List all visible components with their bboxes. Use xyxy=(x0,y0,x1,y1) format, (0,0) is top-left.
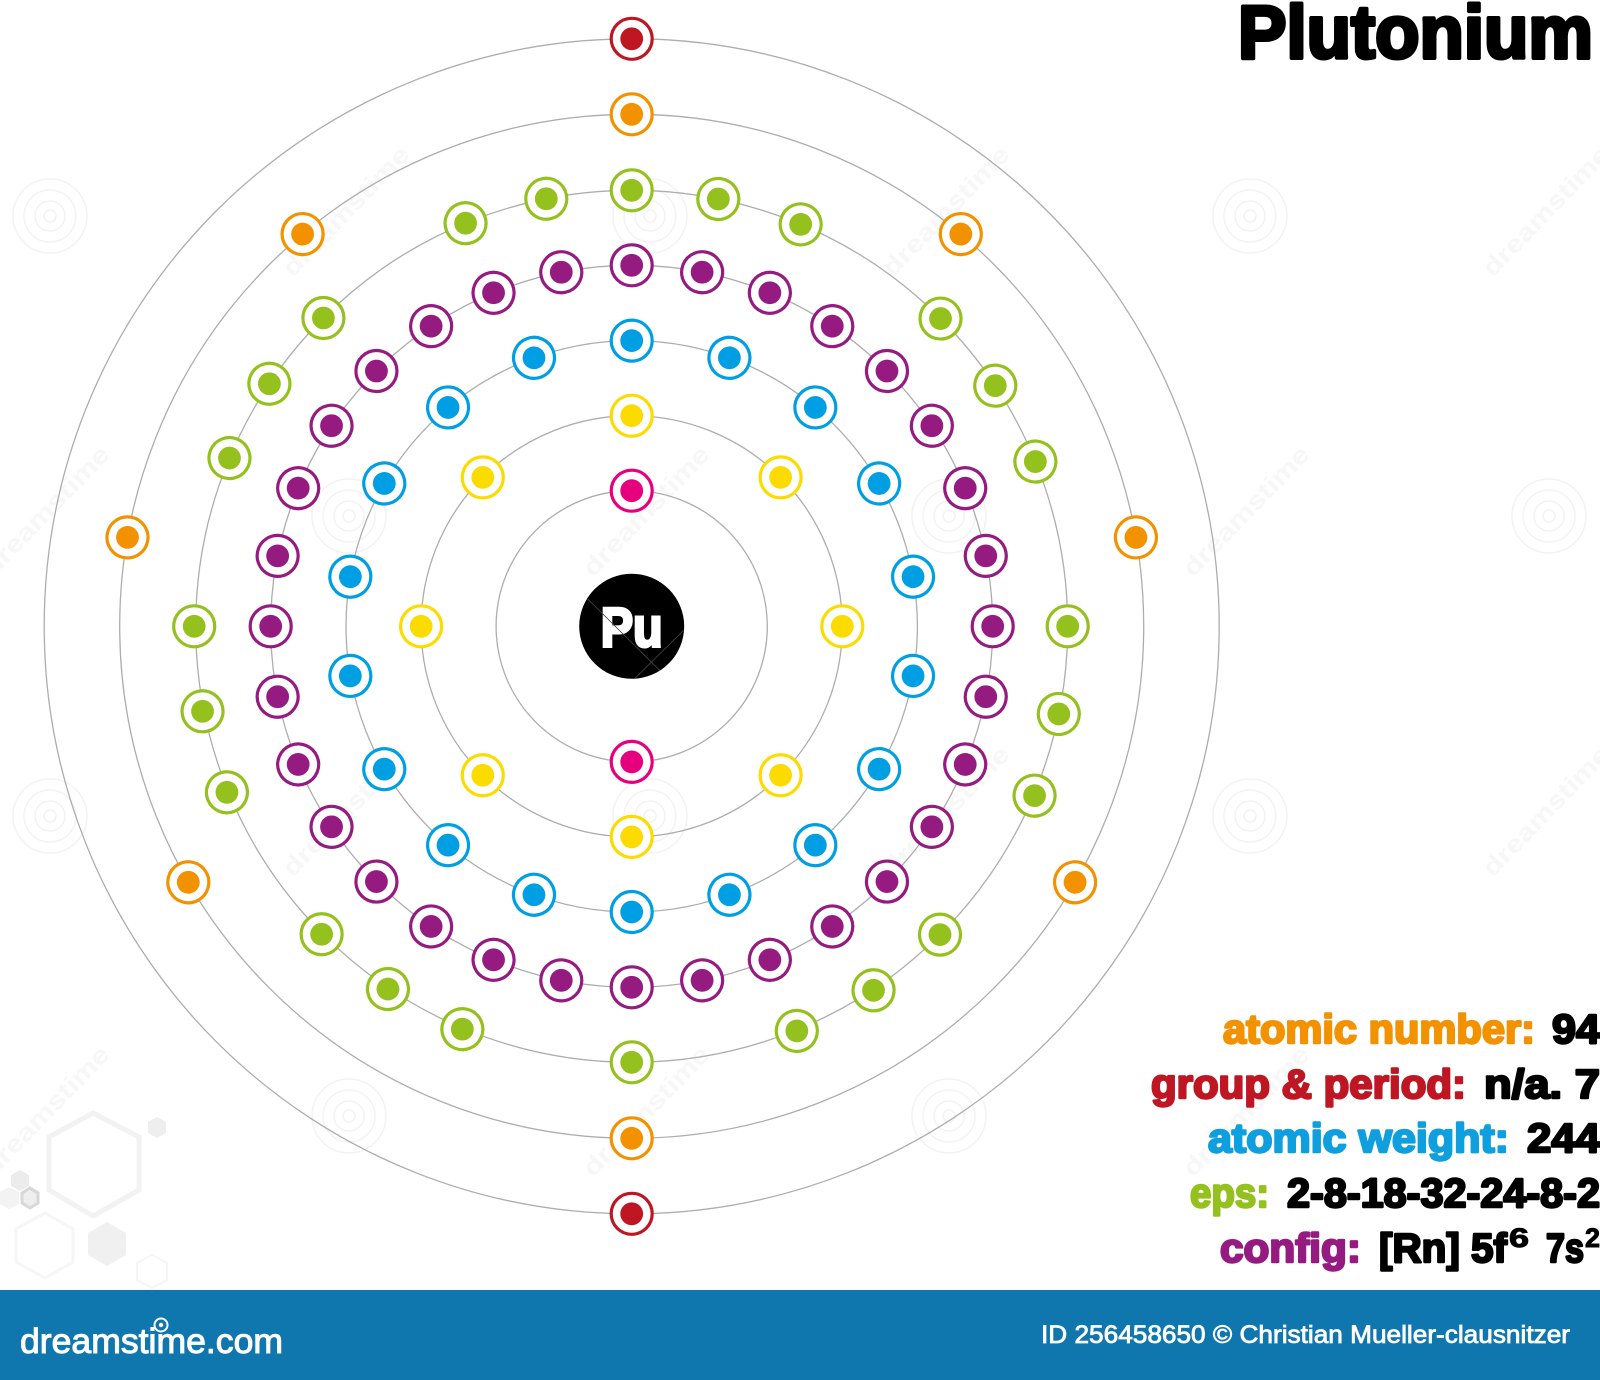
watermark pattern xyxy=(0,140,1600,1182)
watermark pattern: dreamstime xyxy=(277,140,415,282)
watermark pattern: dreamstime xyxy=(1177,1040,1315,1182)
fact: group and period: group & period: xyxy=(1151,1061,1466,1107)
shell 1 electrons: pink xyxy=(611,470,652,782)
fact: electrons per shell: eps: xyxy=(1190,1170,1269,1216)
watermark pattern: dreamstime xyxy=(877,740,1015,882)
fact: group and period: n/a. 7 xyxy=(1484,1061,1600,1107)
fact: atomic number: 94 xyxy=(1552,1006,1600,1052)
atom diagram xyxy=(44,18,1219,1234)
fact: electron configuration: config: xyxy=(1220,1225,1361,1271)
fact: electron configuration xyxy=(1220,1223,1600,1271)
fact: electron configuration: 6 xyxy=(1509,1223,1529,1253)
shell 3 electrons: blue xyxy=(327,320,937,932)
shell 2 electrons: yellow xyxy=(401,395,863,857)
fact: atomic weight: 244 xyxy=(1527,1115,1600,1161)
watermark pattern: dreamstime xyxy=(877,140,1015,282)
nucleus with symbol Pu: Pu xyxy=(601,595,663,658)
decorative hexagons xyxy=(0,1113,167,1288)
fact: electron configuration: 7s xyxy=(1546,1225,1584,1271)
fact: atomic weight: atomic weight: xyxy=(1208,1115,1509,1161)
nucleus with symbol Pu xyxy=(579,574,684,679)
watermark pattern: dreamstime xyxy=(1477,140,1600,282)
fact: electrons per shell: 2-8-18-32-24-8-2 xyxy=(1287,1170,1600,1216)
shell 5 electrons: green xyxy=(174,170,1088,1083)
footer logo: dreamstime.com: dreamstime.com xyxy=(20,1322,283,1361)
shell 4 electrons: purple xyxy=(250,245,1013,1008)
fact: group and period xyxy=(1151,1061,1600,1107)
watermark pattern: dreamstime xyxy=(1177,440,1315,582)
shell 7 electrons: red xyxy=(611,18,652,1234)
fact: electron configuration: [Rn] 5f xyxy=(1379,1225,1507,1271)
watermark pattern: dreamstime xyxy=(277,740,415,882)
watermark pattern: dreamstime xyxy=(577,440,715,582)
watermark pattern: dreamstime xyxy=(1477,740,1600,882)
footer band xyxy=(0,1290,1600,1380)
watermark pattern: dreamstime xyxy=(577,1040,715,1182)
shell 6 electrons: orange xyxy=(104,94,1160,1159)
fact: atomic number: atomic number: xyxy=(1223,1006,1535,1052)
footer credit: ID 256458650 © Christian Mueller-clausnitzer xyxy=(1041,1321,1570,1349)
fact: electron configuration: 2 xyxy=(1585,1223,1600,1253)
shell orbit rings xyxy=(44,39,1219,1214)
